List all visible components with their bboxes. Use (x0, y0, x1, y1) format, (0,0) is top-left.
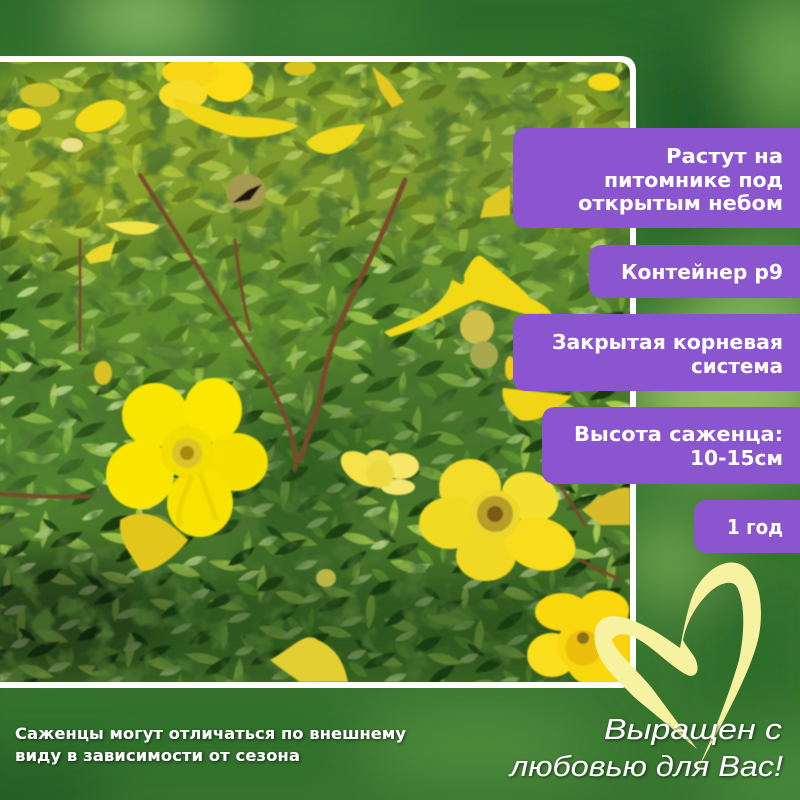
flowers: small background blooms (61, 138, 630, 682)
badge: container (589, 245, 800, 298)
flower: large yellow (106, 378, 268, 537)
badge: grown in open air: открытым небом (578, 191, 783, 215)
slogan: любовью для Вас! (508, 751, 783, 783)
badge: closed root system: система (691, 354, 783, 378)
stems (0, 175, 620, 580)
badge: grown in open air: питомнике под (604, 168, 783, 192)
photo frame (0, 56, 636, 688)
slogan (508, 714, 783, 783)
badge: closed root system: Закрытая корневая (552, 330, 783, 354)
badge: grown in open air (513, 128, 800, 228)
flower: large right (419, 459, 582, 581)
icon: hand-drawn heart (595, 562, 761, 785)
badge: age: 1 год (727, 515, 783, 539)
caption: seedling appearance note (15, 724, 407, 765)
badge: age (694, 500, 800, 553)
badge: container: Контейнер р9 (621, 260, 783, 284)
insect bloom (226, 174, 266, 210)
slogan: Выращен с (604, 714, 783, 746)
flower: bottom right (527, 590, 636, 687)
shadow gaps between leaves (0, 62, 630, 682)
badge: closed root system (513, 314, 800, 391)
flowers: top cluster (7, 58, 620, 154)
foliage tint masses (0, 62, 630, 690)
photo: flowering shrub (0, 58, 636, 690)
badge: seedling height: Высота саженца: (574, 422, 783, 446)
badge: grown in open air: Растут на (666, 144, 783, 168)
caption: seedling appearance note: Саженцы могут отличаться по внешнему (15, 724, 407, 743)
flower: upper right group (384, 256, 572, 421)
badge: seedling height (542, 407, 800, 484)
caption: seedling appearance note: виду в зависимости от сезона (15, 746, 300, 765)
foliage textures (0, 62, 630, 682)
badge: seedling height: 10-15см (690, 446, 783, 470)
flower: small center (340, 449, 420, 496)
